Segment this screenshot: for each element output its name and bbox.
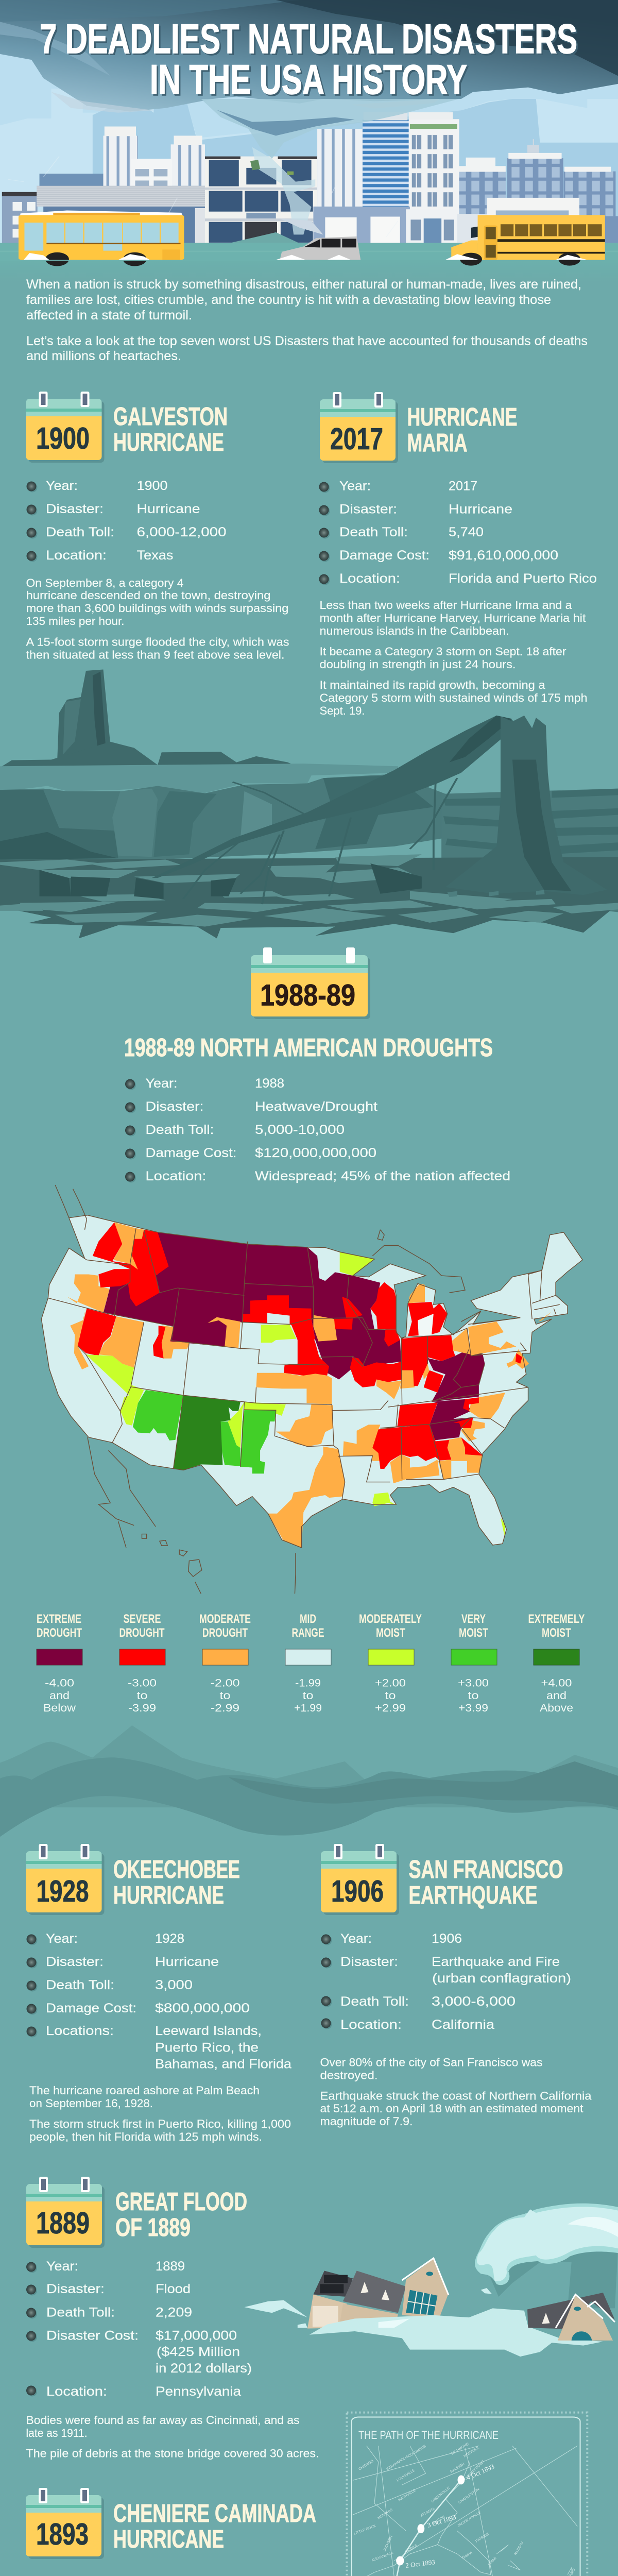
- facts list: $91,610,000,000: [449, 548, 558, 563]
- facts list: [26, 2259, 252, 2399]
- facts list: Locations:: [46, 2024, 114, 2038]
- calendar icon 1988-89: [251, 947, 370, 1019]
- facts list: 2,209: [156, 2305, 192, 2319]
- legend: moderate drought: -2.00: [210, 1677, 240, 1689]
- legend: moderately moist: MODERATELY: [359, 1612, 422, 1626]
- description: destroyed.: [320, 2069, 378, 2081]
- calendar icon 1906: 1906: [331, 1874, 384, 1908]
- facts list: Year:: [46, 2259, 78, 2274]
- legend: severe drought: -3.99: [128, 1702, 156, 1714]
- illustration: drought landscape with cracked ground and dead tree: [0, 669, 618, 938]
- description: magnitude of 7.9.: [320, 2115, 413, 2128]
- facts list: Location:: [46, 548, 107, 563]
- illustration: vintage map, the path of the hurricane: MOBILE: [405, 2544, 418, 2554]
- description: late as 1911.: [26, 2427, 88, 2439]
- legend: mid range: +1.99: [294, 1702, 322, 1714]
- legend: moderate drought: -2.99: [211, 1702, 239, 1714]
- intro text: Let’s take a look at the top seven worst US Disasters that have accounted for thousands of deaths: [26, 334, 588, 348]
- calendar icon 1988-89: 1988-89: [260, 979, 355, 1012]
- map legend: [37, 1612, 585, 1714]
- illustration: flood wave hitting houses: [244, 2204, 618, 2357]
- calendar icon 1928: [26, 1844, 104, 1915]
- illustration: vintage map, the path of the hurricane: ALEXANDRIA: [371, 2551, 394, 2563]
- calendar icon 2017: [320, 392, 398, 463]
- legend: moderate drought: MODERATE: [199, 1612, 251, 1626]
- facts list: 1900: [137, 479, 168, 493]
- heading: Great Flood of 1889: GREAT FLOOD: [115, 2188, 247, 2216]
- facts list: Hurricane: [155, 1955, 219, 1969]
- facts list: Florida and Puerto Rico: [449, 571, 597, 586]
- intro text: When a nation is struck by something disastrous, either natural or human-made, lives are ruined,: [26, 277, 581, 292]
- facts list: $800,000,000: [155, 2001, 250, 2015]
- facts list: Disaster:: [46, 1955, 104, 1969]
- illustration: vintage map, the path of the hurricane: RALEIGH: [450, 2462, 465, 2474]
- intro text: and millions of heartaches.: [26, 349, 181, 363]
- description: Category 5 storm with sustained winds of 175 mph: [319, 691, 587, 704]
- heading: droughts: 1988-89 NORTH AMERICAN DROUGHTS: [124, 1034, 493, 1062]
- illustration: vintage map, the path of the hurricane: PATRICK: [475, 2532, 490, 2544]
- illustration: vintage map, the path of the hurricane: ATLANTA: [420, 2507, 436, 2518]
- description: A 15-foot storm surge flooded the city, which was: [26, 636, 289, 648]
- illustration: vintage map, the path of the hurricane: CHERRY POINT: [464, 2460, 486, 2481]
- description: It maintained its rapid growth, becoming a: [319, 679, 545, 691]
- legend: very moist: VERY: [461, 1612, 486, 1626]
- facts list: Hurricane: [137, 502, 200, 516]
- facts list: Disaster:: [339, 502, 397, 516]
- facts list: 3,000: [155, 1978, 193, 1992]
- facts list: 1906: [432, 1931, 462, 1946]
- illustration: vintage map, the path of the hurricane: GREENVILLE: [431, 2486, 451, 2504]
- legend: very moist: to: [468, 1690, 479, 1702]
- illustration: vintage map, the path of the hurricane: CHARLESTON: [458, 2488, 480, 2505]
- choropleth map of US drought severity: [41, 1185, 582, 1594]
- legend: moderately moist: MOIST: [376, 1626, 405, 1640]
- legend: severe drought: to: [137, 1690, 147, 1702]
- description: Bodies were found as far away as Cincinnati, and as: [26, 2414, 300, 2427]
- facts list: ($425 Million: [157, 2345, 240, 2359]
- illustration: vintage map, the path of the hurricane: 3 Oct 1893: [426, 2513, 457, 2529]
- facts list: Disaster:: [46, 502, 104, 516]
- legend: extremely moist: MOIST: [542, 1626, 571, 1640]
- illustration: vintage map, the path of the hurricane: MIAMI: [487, 2556, 497, 2566]
- description: [29, 2084, 291, 2143]
- legend: severe drought: -3.00: [128, 1677, 157, 1689]
- heading: Okeechobee Hurricane: OKEECHOBEE: [113, 1856, 240, 1884]
- calendar icon 1906: [321, 1844, 399, 1915]
- legend: mid range: [285, 1612, 331, 1714]
- facts list: [125, 1076, 510, 1183]
- facts list: Disaster:: [340, 1955, 398, 1969]
- facts list: Year:: [339, 479, 371, 494]
- facts list: Pennsylvania: [156, 2384, 241, 2399]
- illustration: vintage map, the path of the hurricane: JACKSON: [383, 2535, 393, 2552]
- heading: Galveston Hurricane: HURRICANE: [113, 429, 224, 456]
- description: [26, 577, 289, 662]
- heading: San Francisco Earthquake: [409, 1856, 563, 1909]
- facts list: 5,000-10,000: [255, 1123, 345, 1137]
- facts list: Heatwave/Drought: [255, 1099, 377, 1114]
- heading: Hurricane Maria: HURRICANE: [407, 403, 517, 431]
- facts list: [27, 479, 227, 563]
- description: Earthquake struck the coast of Northern California: [320, 2090, 592, 2102]
- legend: severe drought: DROUGHT: [119, 1626, 165, 1640]
- illustration: vintage map, the path of the hurricane: [347, 2413, 587, 2576]
- illustration: vintage map, the path of the hurricane: JACKSONVILLE: [457, 2511, 482, 2528]
- facts list: [27, 1931, 291, 2071]
- illustration: vintage map, the path of the hurricane: THE PATH OF THE HURRICANE: [358, 2429, 499, 2442]
- description: The storm struck first in Puerto Rico, killing 1,000: [29, 2117, 291, 2130]
- description: [26, 2414, 319, 2460]
- facts list: 3,000-6,000: [432, 1994, 516, 2009]
- facts list: $120,000,000,000: [255, 1146, 376, 1160]
- facts list: Death Toll:: [46, 525, 114, 539]
- facts list: Location:: [46, 2384, 107, 2399]
- panel: Okeechobee hurricane 1928: [26, 1844, 291, 2143]
- illustration: vintage map, the path of the hurricane: MACON: [432, 2515, 445, 2526]
- facts list: 6,000-12,000: [137, 525, 227, 539]
- facts list: Disaster Cost:: [46, 2329, 139, 2343]
- facts list: Year:: [145, 1076, 177, 1091]
- description: Sept. 19.: [319, 704, 365, 717]
- heading: San Francisco Earthquake: SAN FRANCISCO: [409, 1856, 563, 1884]
- illustration: vintage map, the path of the hurricane: MEMPHIS: [377, 2508, 393, 2520]
- panel: 1988-89 North American droughts: [124, 1034, 510, 1183]
- facts list: Damage Cost:: [339, 548, 430, 563]
- illustration: vintage map, the path of the hurricane: INDIANAPOLIS: [386, 2455, 409, 2471]
- facts list: 1988: [255, 1076, 284, 1091]
- facts list: Location:: [339, 571, 400, 586]
- facts list: [321, 1931, 571, 2032]
- description: 135 miles per hour.: [26, 615, 125, 628]
- facts list: 1928: [155, 1931, 184, 1946]
- intro text: families are lost, cities crumble, and the country is hit with a devastating blow leaving those: [26, 293, 551, 307]
- legend: moderate drought: DROUGHT: [202, 1626, 248, 1640]
- legend: extremely moist: and: [546, 1690, 566, 1702]
- facts list: Flood: [156, 2282, 191, 2296]
- heading: Great Flood of 1889: OF 1889: [115, 2214, 191, 2242]
- legend: extremely moist: [528, 1612, 585, 1714]
- description: more than 3,600 buildings with winds surpassing: [26, 602, 288, 615]
- panel: Cheniere Caminada hurricane 1893: [25, 2488, 316, 2576]
- illustration: misty hills: [0, 1725, 618, 1837]
- description: It became a Category 3 storm on Sept. 18 after: [319, 645, 566, 658]
- facts list: 5,740: [449, 525, 484, 539]
- illustration: vintage map, the path of the hurricane: NASSAU: [514, 2541, 524, 2556]
- facts list: [319, 479, 597, 586]
- description: The pile of debris at the stone bridge covered 30 acres.: [26, 2447, 319, 2460]
- description: month after Hurricane Harvey, Hurricane Maria hit: [319, 612, 586, 624]
- description: [320, 2056, 592, 2128]
- facts list: Location:: [145, 1169, 206, 1183]
- description: Over 80% of the city of San Francisco was: [320, 2056, 543, 2069]
- legend: very moist: [451, 1612, 497, 1714]
- illustration: vintage map, the path of the hurricane: LITTLE ROCK: [353, 2524, 376, 2536]
- description: [319, 599, 587, 717]
- title: IN THE USA HISTORY: [150, 57, 467, 103]
- facts list: Disaster:: [46, 2282, 105, 2296]
- heading: Cheniere Caminada Hurricane: HURRICANE: [113, 2526, 224, 2553]
- legend: extreme drought: -4.00: [45, 1677, 74, 1689]
- illustration: vintage map, the path of the hurricane: COLUMBUS: [407, 2445, 427, 2459]
- illustration: vintage map, the path of the hurricane: NORFOLK: [463, 2446, 480, 2459]
- legend: extreme drought: and: [49, 1690, 70, 1702]
- legend: severe drought: SEVERE: [124, 1612, 161, 1626]
- legend: extreme drought: [37, 1612, 82, 1714]
- illustration: vintage map, the path of the hurricane: 2 Oct 1893: [405, 2558, 436, 2569]
- heading: Hurricane Maria: MARIA: [407, 429, 468, 457]
- calendar icon 1900: 1900: [36, 421, 90, 455]
- facts list: in 2012 dollars): [156, 2361, 252, 2376]
- description: hurricane descended on the town, destroying: [26, 589, 271, 602]
- legend: very moist: +3.00: [458, 1677, 489, 1689]
- legend: mid range: -1.99: [295, 1677, 321, 1689]
- legend: moderately moist: +2.00: [375, 1677, 406, 1689]
- hero illustration: flooded city and tornado: [0, 0, 618, 283]
- facts list: Death Toll:: [46, 2305, 115, 2319]
- facts list: Earthquake and Fire: [432, 1955, 560, 1969]
- legend: extreme drought: EXTREME: [37, 1612, 81, 1626]
- illustration: vintage map, the path of the hurricane: TAMPA: [461, 2551, 473, 2561]
- calendar icon 1893: [26, 2488, 104, 2559]
- intro text: affected in a state of turmoil.: [26, 308, 192, 323]
- panel: Great Flood of 1889: [26, 2177, 319, 2460]
- illustration: vintage map, the path of the hurricane: LOUISVILLE: [396, 2468, 416, 2483]
- panel: Galveston hurricane 1900: [26, 392, 289, 662]
- facts list: Disaster:: [145, 1099, 204, 1114]
- legend: extremely moist: EXTREMELY: [528, 1612, 585, 1626]
- calendar icon 1893: 1893: [36, 2517, 89, 2551]
- heading: Okeechobee Hurricane: HURRICANE: [113, 1882, 224, 1909]
- heading: Galveston Hurricane: GALVESTON: [113, 403, 228, 431]
- calendar icon 2017: 2017: [330, 422, 383, 456]
- facts list: Death Toll:: [340, 1994, 409, 2009]
- calendar icon 1889: [26, 2177, 105, 2248]
- legend: extreme drought: Below: [43, 1702, 76, 1714]
- facts list: Texas: [137, 548, 173, 563]
- legend: mid range: RANGE: [291, 1626, 324, 1640]
- calendar icon 1900: [26, 392, 104, 463]
- legend: moderately moist: to: [385, 1690, 396, 1702]
- intro text: [26, 277, 588, 363]
- facts list: Year:: [46, 479, 78, 493]
- description: Less than two weeks after Hurricane Irma and a: [319, 599, 572, 612]
- legend: moderate drought: to: [219, 1690, 231, 1702]
- facts list: Leeward Islands,: [155, 2024, 262, 2038]
- description: on September 16, 1928.: [29, 2097, 153, 2110]
- title: [40, 16, 577, 103]
- legend: very moist: +3.99: [458, 1702, 488, 1714]
- facts list: Widespread; 45% of the nation affected: [255, 1169, 510, 1183]
- facts list: Hurricane: [449, 502, 512, 516]
- description: then situated at less than 9 feet above sea level.: [26, 648, 284, 662]
- heading: Great Flood of 1889: [115, 2188, 247, 2242]
- description: The hurricane roared ashore at Palm Beach: [29, 2084, 260, 2097]
- facts list: Death Toll:: [46, 1978, 114, 1992]
- description: On September 8, a category 4: [26, 577, 184, 589]
- facts list: Damage Cost:: [145, 1146, 237, 1160]
- heading: Hurricane Maria: [407, 403, 517, 457]
- facts list: 2017: [449, 479, 477, 494]
- facts list: Year:: [46, 1931, 78, 1946]
- description: at 5:12 a.m. on April 18 with an estimated moment: [320, 2102, 583, 2115]
- illustration: vintage map, the path of the hurricane: RICHMOND: [451, 2442, 470, 2456]
- facts list: Death Toll:: [145, 1123, 214, 1137]
- illustration: vintage map, the path of the hurricane: NASHVILLE: [398, 2488, 417, 2502]
- panel: Hurricane Maria 2017: [319, 392, 597, 717]
- legend: very moist: MOIST: [459, 1626, 488, 1640]
- legend: moderately moist: [359, 1612, 422, 1714]
- facts list: Bahamas, and Florida: [155, 2057, 291, 2071]
- legend: mid range: MID: [300, 1612, 316, 1626]
- legend: severe drought: [119, 1612, 165, 1714]
- description: doubling in strength in just 24 hours.: [319, 658, 516, 671]
- calendar icon 1889: 1889: [36, 2206, 90, 2240]
- facts list: Puerto Rico, the: [155, 2040, 259, 2055]
- panel: San Francisco earthquake 1906: [320, 1844, 592, 2128]
- legend: moderate drought: [199, 1612, 251, 1714]
- calendar icon 1928: 1928: [36, 1874, 89, 1908]
- facts list: 1889: [156, 2259, 185, 2274]
- heading: Cheniere Caminada Hurricane: CHENIERE CAMINADA: [113, 2500, 316, 2528]
- facts list: Damage Cost:: [46, 2001, 136, 2015]
- description: people, then hit Florida with 125 mph winds.: [29, 2130, 262, 2143]
- illustration: vintage map, the path of the hurricane: CHICAGO: [358, 2459, 374, 2471]
- facts list: Year:: [340, 1931, 372, 1946]
- legend: moderately moist: +2.99: [375, 1702, 406, 1714]
- facts list: $17,000,000: [156, 2329, 237, 2343]
- facts list: Location:: [340, 2018, 402, 2032]
- heading: Cheniere Caminada Hurricane: [113, 2500, 316, 2553]
- facts list: Death Toll:: [339, 525, 408, 539]
- illustration: vintage map, the path of the hurricane: 4 Oct 1893: [465, 2463, 495, 2482]
- heading: Galveston Hurricane: [113, 403, 228, 456]
- legend: extreme drought: DROUGHT: [37, 1626, 82, 1640]
- facts list: California: [432, 2018, 494, 2032]
- legend: extremely moist: Above: [540, 1702, 573, 1714]
- description: numerous islands in the Caribbean.: [319, 624, 509, 637]
- legend: mid range: to: [303, 1690, 313, 1702]
- legend: extremely moist: +4.00: [541, 1677, 572, 1689]
- heading: San Francisco Earthquake: EARTHQUAKE: [409, 1882, 538, 1909]
- facts list: (urban conflagration): [432, 1971, 571, 1986]
- heading: Okeechobee Hurricane: [113, 1856, 240, 1909]
